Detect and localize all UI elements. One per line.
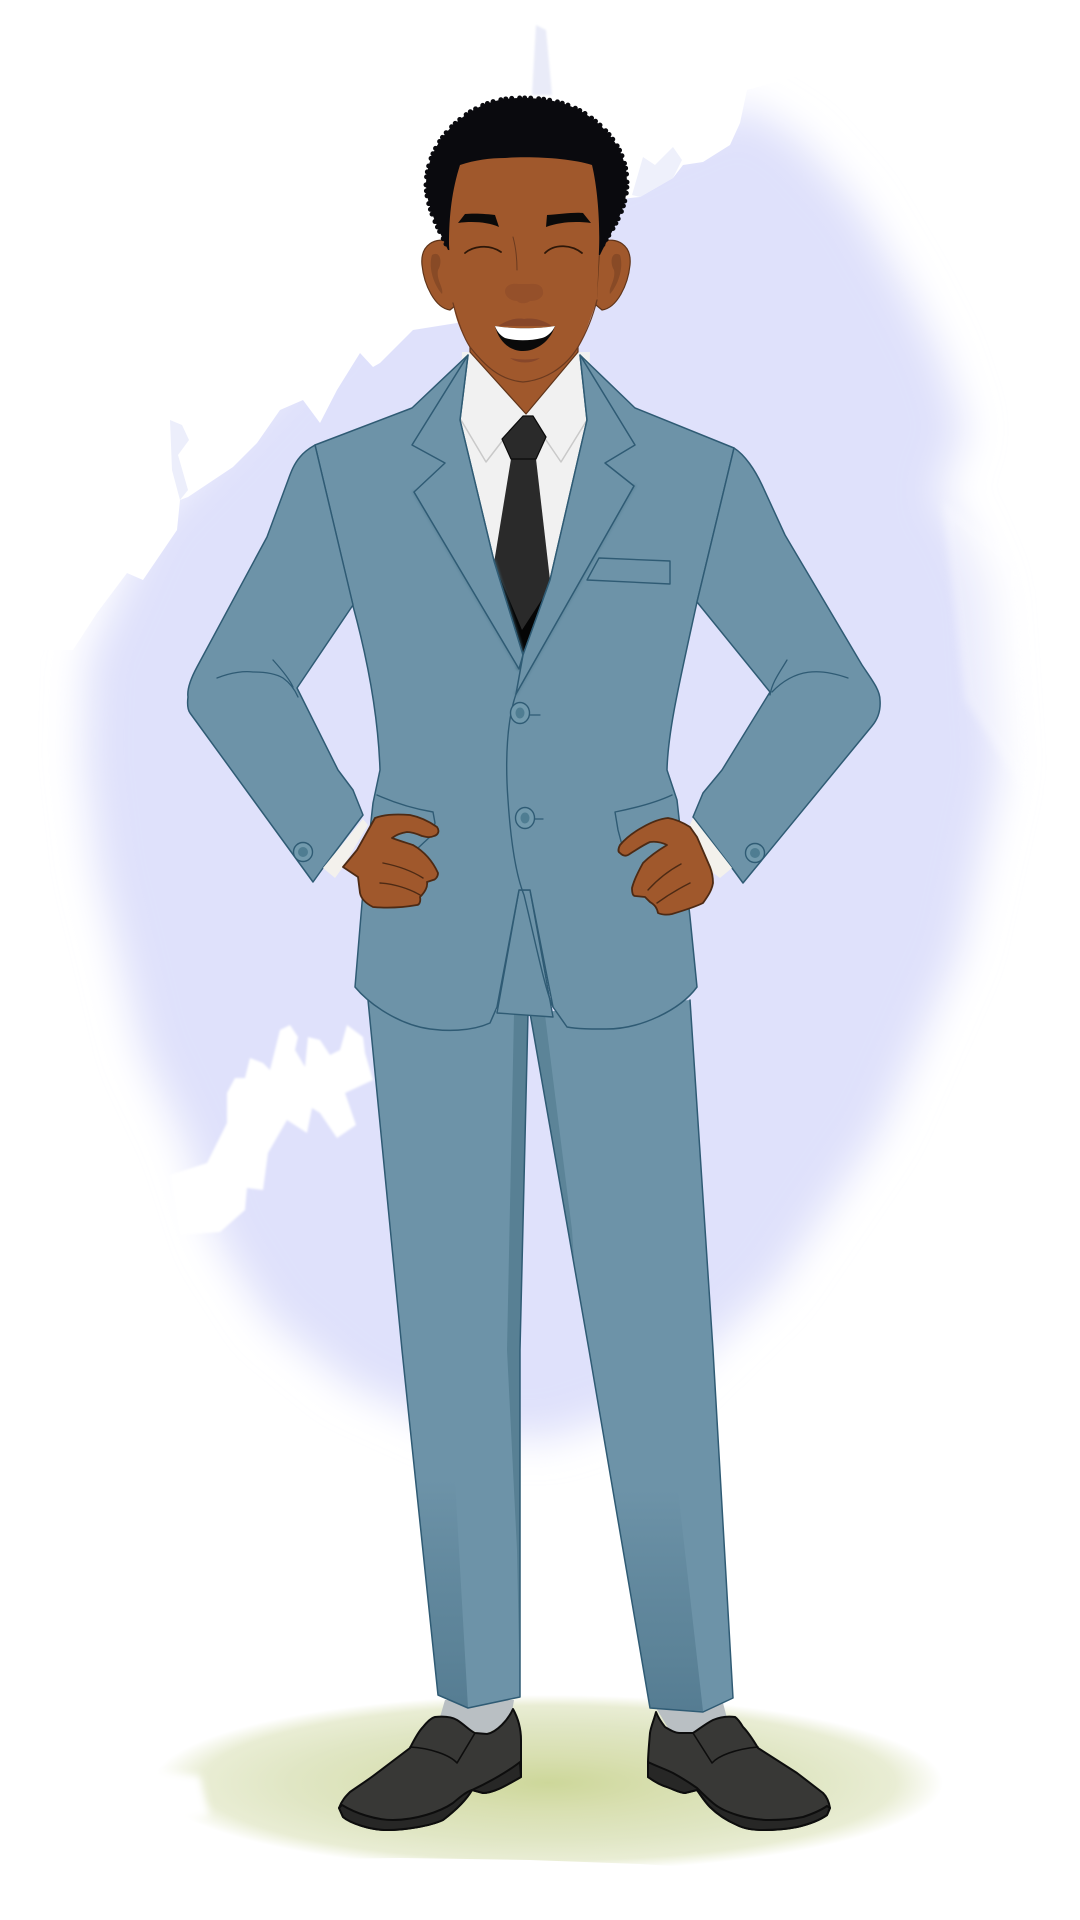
jaw crease bbox=[453, 300, 597, 382]
left trouser leg bbox=[368, 1000, 528, 1708]
eyebrows bbox=[458, 213, 591, 227]
right cuff bbox=[689, 818, 732, 878]
right hip pocket flap bbox=[615, 795, 672, 845]
chest pocket bbox=[587, 558, 670, 584]
figure: man in suit bbox=[188, 98, 880, 1830]
left hip pocket flap bbox=[377, 795, 435, 850]
mouth bbox=[495, 319, 555, 362]
neck bbox=[470, 335, 578, 414]
shirt bbox=[460, 352, 590, 590]
right trouser leg bbox=[530, 1000, 733, 1712]
white tear lower left bbox=[170, 1025, 373, 1235]
hair bbox=[426, 98, 627, 255]
jacket button lower bbox=[516, 808, 543, 828]
nose bbox=[505, 237, 543, 303]
right sleeve bbox=[693, 448, 880, 883]
ground shadow bbox=[150, 1695, 943, 1871]
light wash spike upper left bbox=[170, 420, 189, 500]
face bbox=[449, 157, 599, 382]
jacket front edge bbox=[507, 694, 553, 1007]
closed eyes bbox=[465, 246, 582, 253]
left sleeve bbox=[188, 445, 363, 882]
lighter wash right bbox=[942, 500, 1030, 800]
left cuff bbox=[323, 819, 368, 878]
lapels bbox=[412, 355, 635, 694]
left shoe bbox=[339, 1709, 521, 1830]
vest panel bbox=[497, 890, 553, 1017]
jacket body bbox=[315, 355, 734, 1030]
watercolor background blob bbox=[85, 25, 1030, 1440]
jacket button upper bbox=[510, 702, 540, 724]
right hand bbox=[618, 818, 713, 915]
tie bbox=[494, 416, 550, 653]
white patch on ground left bbox=[162, 1772, 210, 1816]
left sleeve button bbox=[294, 842, 312, 862]
left hand bbox=[343, 814, 438, 908]
right sleeve button bbox=[746, 844, 764, 862]
ears bbox=[422, 240, 630, 310]
head bbox=[426, 98, 627, 382]
trousers bbox=[368, 1000, 733, 1712]
light wash spike behind hair bbox=[532, 25, 552, 95]
right shoe bbox=[648, 1712, 830, 1830]
light wash spike upper right bbox=[632, 147, 682, 197]
socks bbox=[440, 1700, 727, 1735]
